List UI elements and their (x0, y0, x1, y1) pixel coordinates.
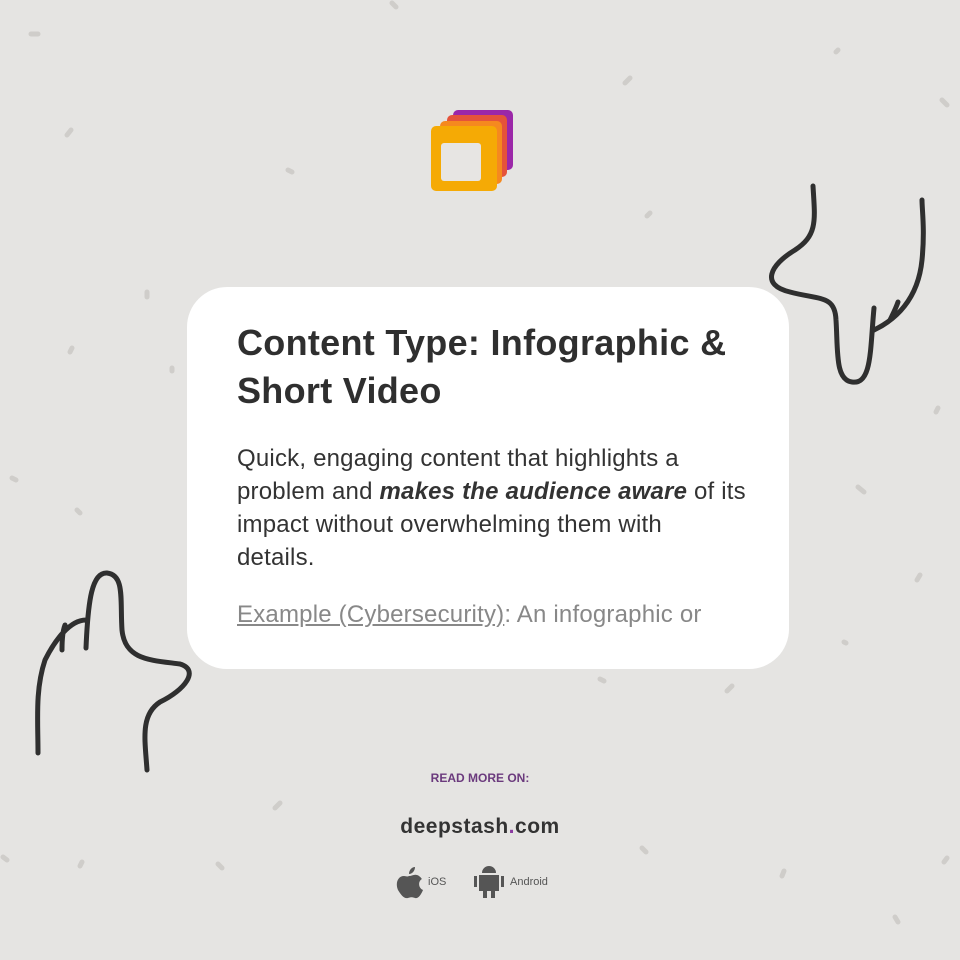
icon: android: Android (510, 876, 548, 888)
text block: description: problem and makes the audience aware of its (237, 478, 746, 505)
footer: deepstash: deepstash.com (400, 815, 560, 838)
text block: description (237, 445, 746, 571)
text block: description: Quick, engaging content that highlights a (237, 445, 679, 472)
title (237, 322, 726, 411)
text block: description: details. (237, 544, 315, 571)
icon: apple iOS (396, 867, 446, 898)
panel: card (187, 287, 789, 669)
title: Short Video (237, 370, 442, 411)
footer: read more: READ MORE ON: (431, 771, 529, 785)
squiggle: left hand (38, 573, 189, 770)
icon: android (474, 866, 548, 898)
icon: apple iOS: iOS (428, 876, 446, 888)
text block: description: impact without overwhelming them with (237, 511, 662, 538)
title: Content Type: Infographic & (237, 322, 726, 363)
icon: logo (431, 110, 513, 191)
text block: example: Example (Cybersecurity): An infographic or (237, 601, 702, 628)
